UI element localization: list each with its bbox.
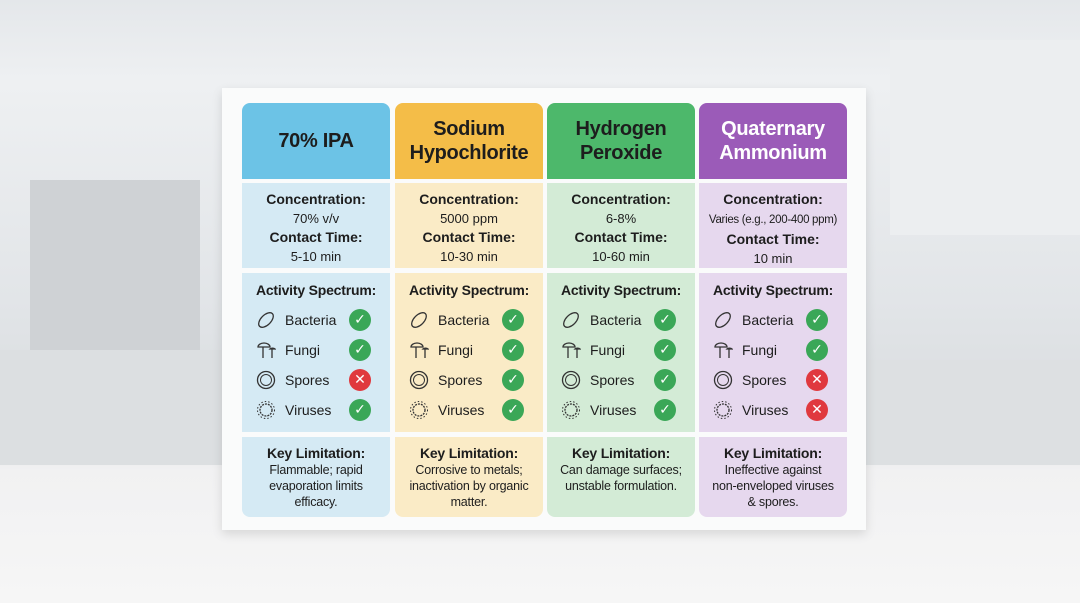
activity spectrum: Activity Spectrum:	[713, 282, 833, 298]
key limitation: non-enveloped viruses	[712, 479, 834, 493]
header: 70% IPA	[242, 103, 390, 179]
key limitation	[547, 437, 695, 517]
activity spectrum: ✓	[659, 342, 671, 358]
activity spectrum	[547, 273, 695, 432]
activity spectrum: Viruses	[742, 402, 788, 418]
activity spectrum: Activity Spectrum:	[561, 282, 681, 298]
key limitation: Key Limitation:	[267, 445, 365, 461]
concentration block: 5000 ppm	[440, 211, 498, 226]
activity spectrum: Bacteria	[438, 312, 489, 328]
key limitation	[699, 437, 847, 517]
key limitation: Can damage surfaces;	[560, 463, 682, 477]
column: Hydrogen Peroxide	[547, 103, 695, 517]
concentration block: 10-30 min	[440, 249, 498, 264]
header: Hydrogen Peroxide	[547, 103, 695, 179]
activity spectrum: ✕	[811, 372, 823, 388]
concentration block	[699, 183, 847, 268]
key limitation: inactivation by organic	[409, 479, 529, 493]
concentration block: Contact Time:	[726, 231, 820, 247]
activity spectrum: ✕	[811, 402, 823, 418]
activity spectrum	[395, 273, 543, 432]
activity spectrum: Spores	[438, 372, 482, 388]
activity spectrum: ✓	[507, 402, 519, 418]
key limitation: Key Limitation:	[420, 445, 518, 461]
column: Quaternary Ammonium	[699, 103, 847, 517]
activity spectrum: Viruses	[590, 402, 636, 418]
activity spectrum: Fungi	[438, 342, 473, 358]
concentration block	[242, 183, 390, 268]
key limitation	[395, 437, 543, 517]
key limitation: Corrosive to metals;	[415, 463, 523, 477]
column: Sodium Hypochlorite	[395, 103, 543, 517]
key limitation: unstable formulation.	[565, 479, 677, 493]
activity spectrum: Spores	[285, 372, 329, 388]
header: Quaternary Ammonium: Ammonium	[719, 142, 827, 164]
concentration block: Contact Time:	[269, 229, 363, 245]
activity spectrum: Spores	[590, 372, 634, 388]
header: Quaternary Ammonium: Quaternary	[721, 118, 825, 140]
activity spectrum: ✓	[811, 312, 823, 328]
concentration block: Contact Time:	[422, 229, 516, 245]
activity spectrum: ✓	[659, 372, 671, 388]
activity spectrum: Bacteria	[285, 312, 336, 328]
activity spectrum: Fungi	[590, 342, 625, 358]
header: Sodium Hypochlorite: Sodium	[433, 118, 505, 140]
activity spectrum: ✓	[354, 342, 366, 358]
concentration block: Concentration:	[266, 191, 366, 207]
header: Hydrogen Peroxide: Peroxide	[580, 142, 662, 164]
activity spectrum: ✓	[811, 342, 823, 358]
activity spectrum: Spores	[742, 372, 786, 388]
concentration block: Concentration:	[419, 191, 519, 207]
header: 70% IPA: 70% IPA	[278, 130, 354, 152]
key limitation: Key Limitation:	[572, 445, 670, 461]
concentration block: 10 min	[753, 251, 793, 266]
activity spectrum: ✓	[659, 312, 671, 328]
key limitation: Flammable; rapid	[269, 463, 363, 477]
concentration block: 6-8%	[606, 211, 636, 226]
activity spectrum	[699, 273, 847, 432]
header: Sodium Hypochlorite: Hypochlorite	[410, 142, 528, 164]
key limitation	[242, 437, 390, 517]
concentration block: Contact Time:	[574, 229, 668, 245]
activity spectrum: Activity Spectrum:	[256, 282, 376, 298]
header: Sodium Hypochlorite	[395, 103, 543, 179]
key limitation: efficacy.	[295, 495, 337, 509]
activity spectrum: ✓	[507, 372, 519, 388]
activity spectrum: Bacteria	[590, 312, 641, 328]
activity spectrum: ✓	[354, 402, 366, 418]
activity spectrum: Viruses	[285, 402, 331, 418]
key limitation: Key Limitation:	[724, 445, 822, 461]
header: Quaternary Ammonium	[699, 103, 847, 179]
activity spectrum	[242, 273, 390, 432]
activity spectrum: ✓	[354, 312, 366, 328]
activity spectrum: Fungi	[285, 342, 320, 358]
concentration block: Concentration:	[723, 191, 823, 207]
concentration block: Concentration:	[571, 191, 671, 207]
concentration block	[547, 183, 695, 268]
activity spectrum: ✓	[659, 402, 671, 418]
concentration block	[395, 183, 543, 268]
activity spectrum: Bacteria	[742, 312, 793, 328]
key limitation: Ineffective against	[725, 463, 821, 477]
activity spectrum: ✓	[507, 342, 519, 358]
activity spectrum: Activity Spectrum:	[409, 282, 529, 298]
column: 70% IPA	[242, 103, 390, 517]
concentration block: 5-10 min	[291, 249, 341, 264]
key limitation: matter.	[451, 495, 487, 509]
key limitation: evaporation limits	[269, 479, 363, 493]
concentration block: 10-60 min	[592, 249, 650, 264]
concentration block: 70% v/v	[293, 211, 339, 226]
activity spectrum: ✓	[507, 312, 519, 328]
activity spectrum: Viruses	[438, 402, 484, 418]
concentration block: Varies (e.g., 200-400 ppm)	[709, 214, 837, 226]
header: Hydrogen Peroxide: Hydrogen	[576, 118, 666, 140]
activity spectrum: Fungi	[742, 342, 777, 358]
activity spectrum: ✕	[354, 372, 366, 388]
key limitation: & spores.	[747, 495, 798, 509]
board	[222, 88, 866, 530]
